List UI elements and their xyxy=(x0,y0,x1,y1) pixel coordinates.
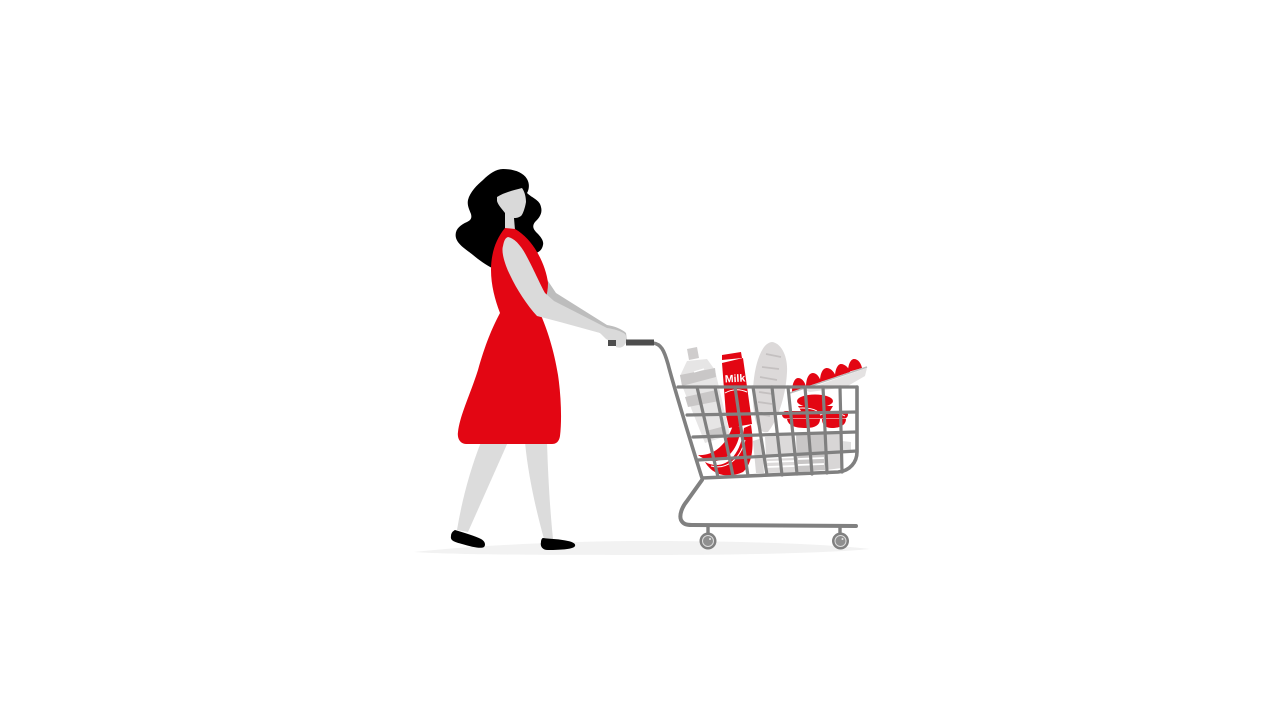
basket grid verticals xyxy=(697,387,842,477)
shopping cart xyxy=(653,343,857,535)
right leg xyxy=(525,442,553,539)
bottle xyxy=(680,347,730,443)
box and packages xyxy=(753,432,851,473)
egg carton xyxy=(790,359,867,393)
right shoe xyxy=(541,538,575,550)
hair xyxy=(456,169,543,268)
cart handle xyxy=(608,340,654,346)
back arm xyxy=(545,278,627,340)
basket frame and push bar stem xyxy=(653,343,857,478)
milk carton xyxy=(722,352,752,428)
milk label: Milk xyxy=(725,372,746,386)
baguette xyxy=(753,342,787,432)
sausages xyxy=(782,394,848,428)
ground shadow xyxy=(414,541,870,555)
basket grid horizontals xyxy=(678,387,857,460)
neck and face xyxy=(497,188,526,230)
wheel stems xyxy=(708,526,840,535)
left leg xyxy=(457,442,508,532)
red dress xyxy=(458,228,561,444)
left shoe xyxy=(451,530,485,548)
cart chassis xyxy=(680,480,856,526)
groceries xyxy=(680,342,867,475)
woman xyxy=(451,169,627,550)
bananas xyxy=(698,425,753,475)
rear wheel xyxy=(832,532,849,550)
front wheel xyxy=(700,532,716,550)
hand over handle xyxy=(616,337,626,348)
front arm and hand xyxy=(502,237,626,347)
